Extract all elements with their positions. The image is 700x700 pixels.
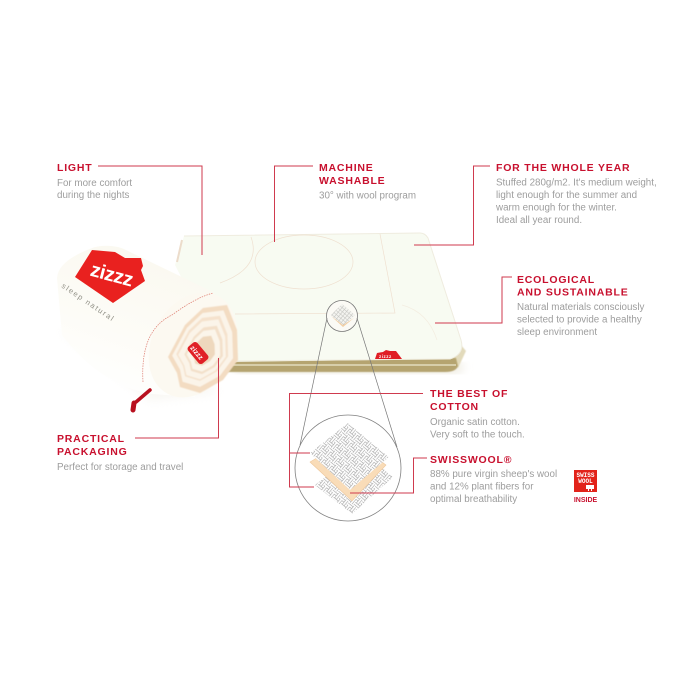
roll end [131,277,255,413]
duvet top [175,233,462,362]
roll body [57,246,225,397]
callout: practical packaging [57,358,218,473]
lower weave [315,450,393,514]
callout: swisswool: SWISSWOOL® [430,454,512,466]
duvet quilting [177,234,437,340]
callout: best of cotton: Organic satin cotton. [430,417,520,428]
zoom lines [300,318,397,447]
swisswool badge: WOOL [578,478,593,485]
duvet fringe [452,345,466,368]
callout: machine washable [274,162,416,242]
callout: ecological: ECOLOGICAL [517,274,595,286]
callout: practical packaging: PRACTICAL [57,433,125,445]
callout: for the whole year: Ideal all year round. [496,215,582,226]
callout: ecological: selected to provide a healthy [517,314,642,326]
callout: light: For more comfort [57,178,132,189]
roll tag: zizzz [188,345,204,362]
roll logo [75,250,145,303]
roll shadow [60,330,220,400]
callout: machine washable: 30° with wool program [319,190,416,202]
callout: ecological: AND SUSTAINABLE [517,286,629,298]
callout: swisswool: optimal breathability [430,494,517,505]
swisswool badge: INSIDE [574,497,597,504]
callout: ecological: Natural materials consciously [517,302,645,313]
callout: light: LIGHT [57,162,92,174]
callout: swisswool: and 12% plant fibers for [430,482,534,492]
big zoom circle [295,415,401,521]
callout: best of cotton: Very soft to the touch. [430,430,525,440]
small zoom circle [326,300,358,332]
callout: light: during the nights [57,190,130,201]
wool layer [310,438,386,501]
swisswool badge: SWISS [576,472,595,479]
callout: ecological [435,274,645,338]
callout: swisswool: 88% pure virgin sheep's wool [430,469,557,480]
callout: practical packaging: Perfect for storage and travel [57,462,183,473]
roll logo: zizzz [88,259,136,292]
callout: for the whole year: warm enough for the winter. [495,202,617,214]
rolled duvet [57,246,255,413]
duvet tag: zizzz [379,354,392,359]
callout: practical packaging: PACKAGING [57,446,128,458]
duvet [175,233,466,372]
callout: for the whole year: Stuffed 280g/m2. It's medium weight, [496,178,657,188]
roll slogan: sleep natural [60,281,117,324]
icon: sheep [586,485,594,491]
callout: for the whole year: FOR THE WHOLE YEAR [496,162,630,174]
callout: best of cotton: COTTON [430,401,479,413]
duvet tag [375,350,402,359]
callout: swisswool [350,454,557,505]
duvet shadow [235,364,464,372]
callout: for the whole year [414,162,657,245]
upper weave [310,423,389,490]
swisswool badge [574,470,597,504]
callout: light [57,162,202,255]
drawstring [133,390,150,410]
callout: best of cotton [290,388,525,487]
callout: ecological: sleep environment [517,327,597,338]
callout: for the whole year: light enough for the summer and [496,190,637,201]
callout: machine washable: WASHABLE [319,175,385,187]
callout: best of cotton: THE BEST OF [430,388,508,400]
callout: machine washable: MACHINE [319,162,374,174]
roll tag [186,341,210,365]
duvet gold edge [225,358,458,372]
